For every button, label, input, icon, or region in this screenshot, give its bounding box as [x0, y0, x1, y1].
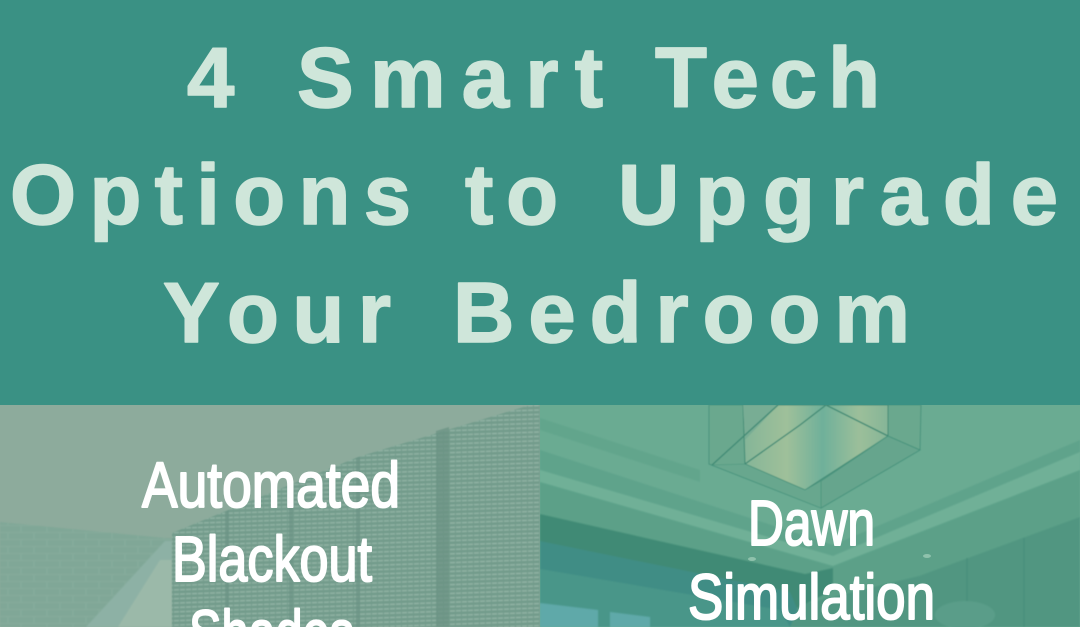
pendant lamp	[709, 405, 921, 508]
title: to	[465, 148, 558, 243]
title: Bedroom	[453, 266, 910, 361]
header band	[0, 0, 1080, 405]
brick wall	[0, 522, 172, 627]
title: Smart	[297, 31, 603, 126]
title: Upgrade	[618, 148, 1058, 243]
title: 4	[187, 31, 234, 126]
panel heading: Automated	[142, 449, 400, 521]
panel: automated blackout shades	[0, 405, 540, 627]
window blinds	[172, 405, 540, 627]
panel heading	[690, 500, 932, 620]
title	[10, 31, 1058, 361]
title: Your	[163, 266, 391, 361]
ceiling spotlights	[748, 554, 931, 561]
ceiling background	[540, 405, 1080, 627]
panel heading: Blackout	[172, 523, 372, 595]
title: Tech	[655, 31, 880, 126]
ceiling background	[0, 405, 540, 627]
panel: dawn simulation	[540, 405, 1080, 627]
title: Options	[10, 148, 411, 243]
ceiling tray shading	[540, 418, 1080, 627]
panel heading	[142, 449, 400, 627]
panel heading: Dawn	[748, 487, 875, 559]
